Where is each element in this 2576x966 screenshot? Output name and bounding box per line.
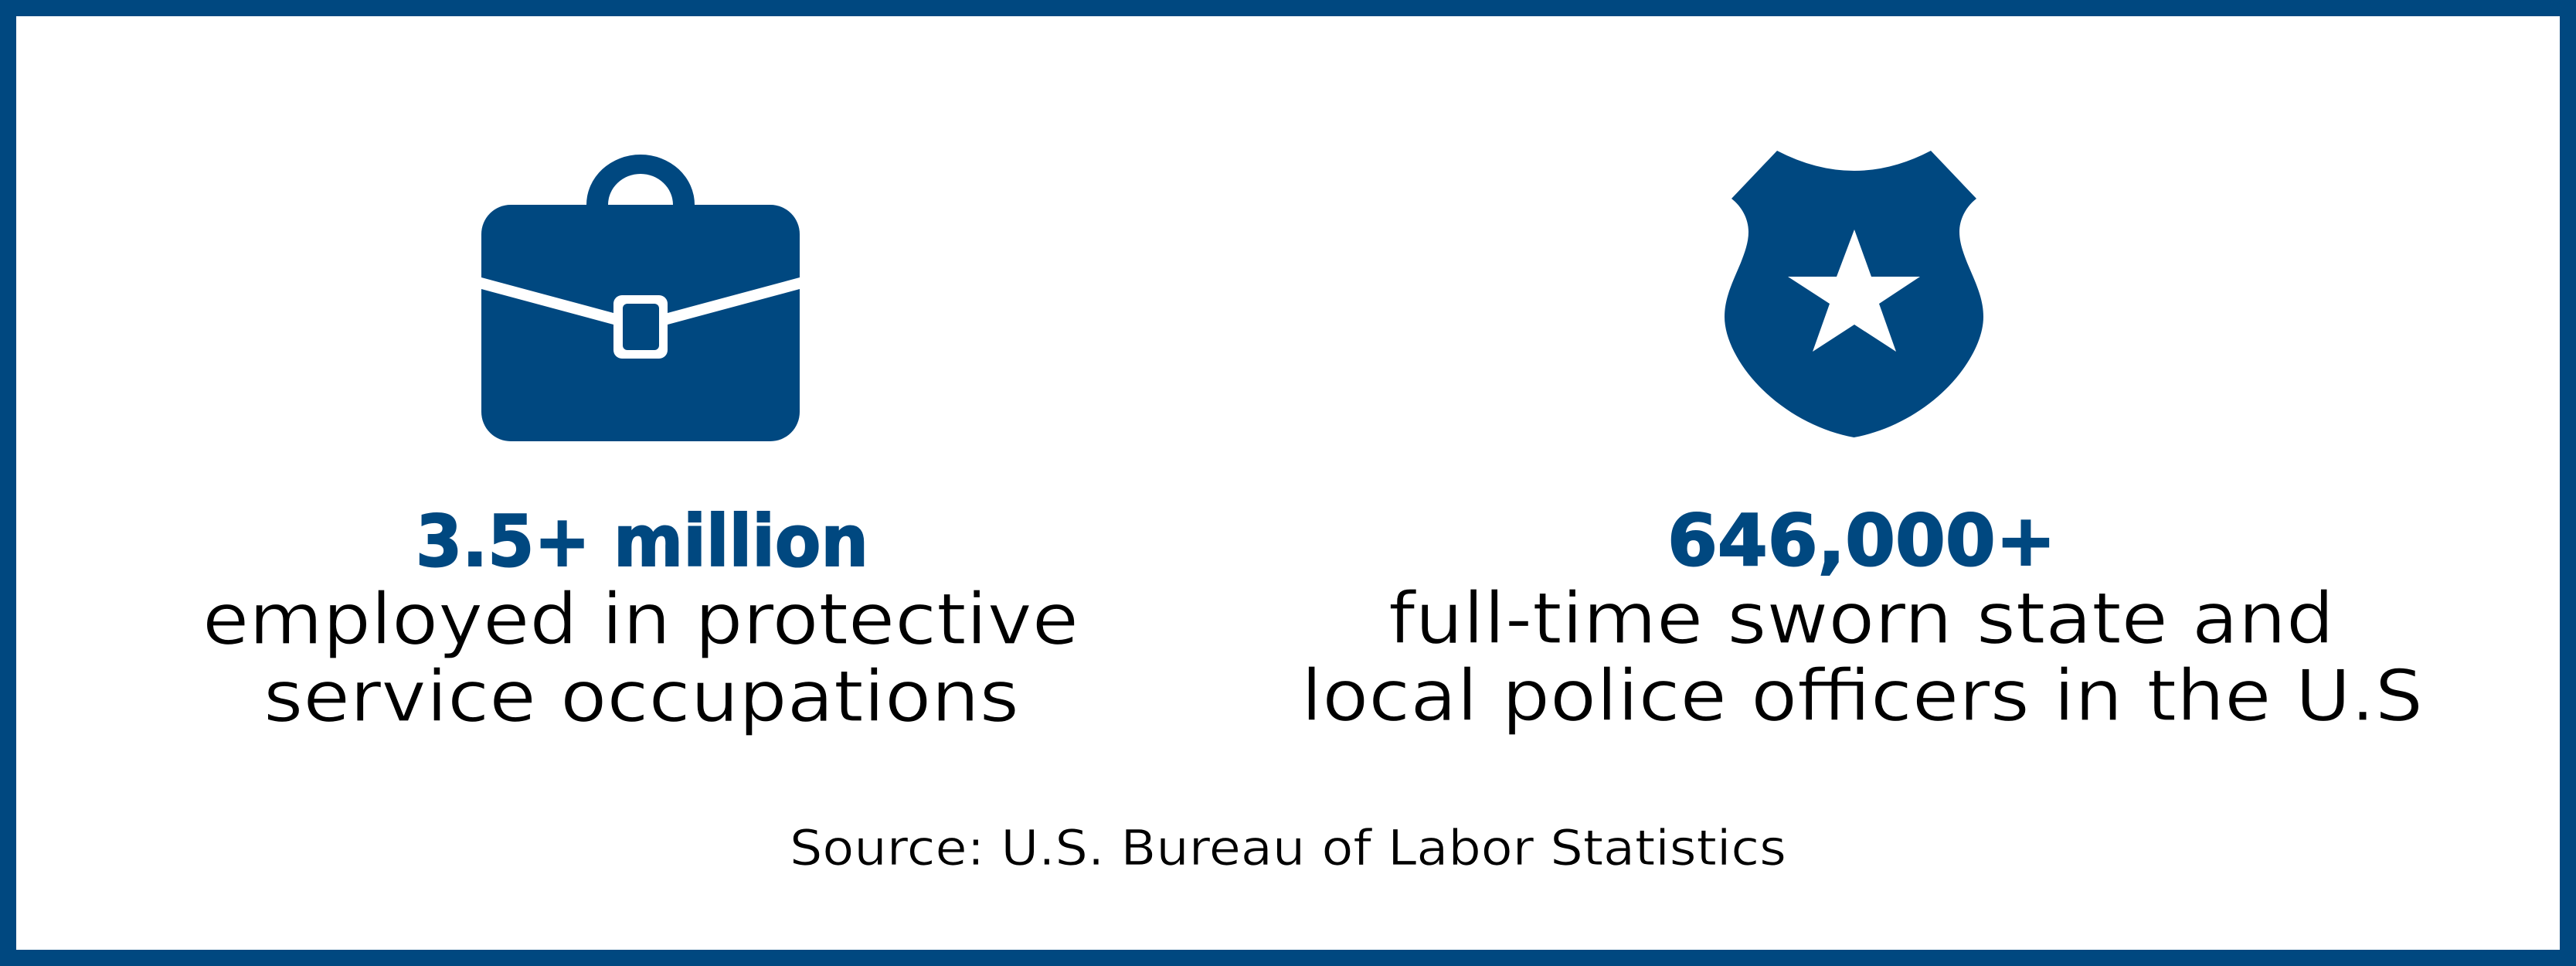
stat heading: 646,000+: 646,000+: [1667, 499, 2056, 582]
icon: briefcase: [481, 155, 800, 441]
icon: police badge with star: [1725, 151, 1983, 437]
panel: protective service employment: [202, 155, 1079, 738]
source note: Source: U.S. Bureau of Labor Statistics: [790, 820, 1786, 876]
stat description: protective service occupations: service occupations: [263, 655, 1019, 738]
panel: police officers: [1301, 151, 2423, 737]
stat description: sworn state and local police officers: [1301, 577, 2423, 737]
stat heading: 3.5+ million: 3.5+ million: [416, 500, 868, 583]
stat description: protective service occupations: employed in protective: [202, 578, 1079, 661]
stat description: sworn state and local police officers: full-time sworn state and: [1388, 577, 2334, 660]
stat description: protective service occupations: [202, 578, 1079, 738]
stat description: sworn state and local police officers: local police officers in the U.S: [1301, 655, 2423, 737]
